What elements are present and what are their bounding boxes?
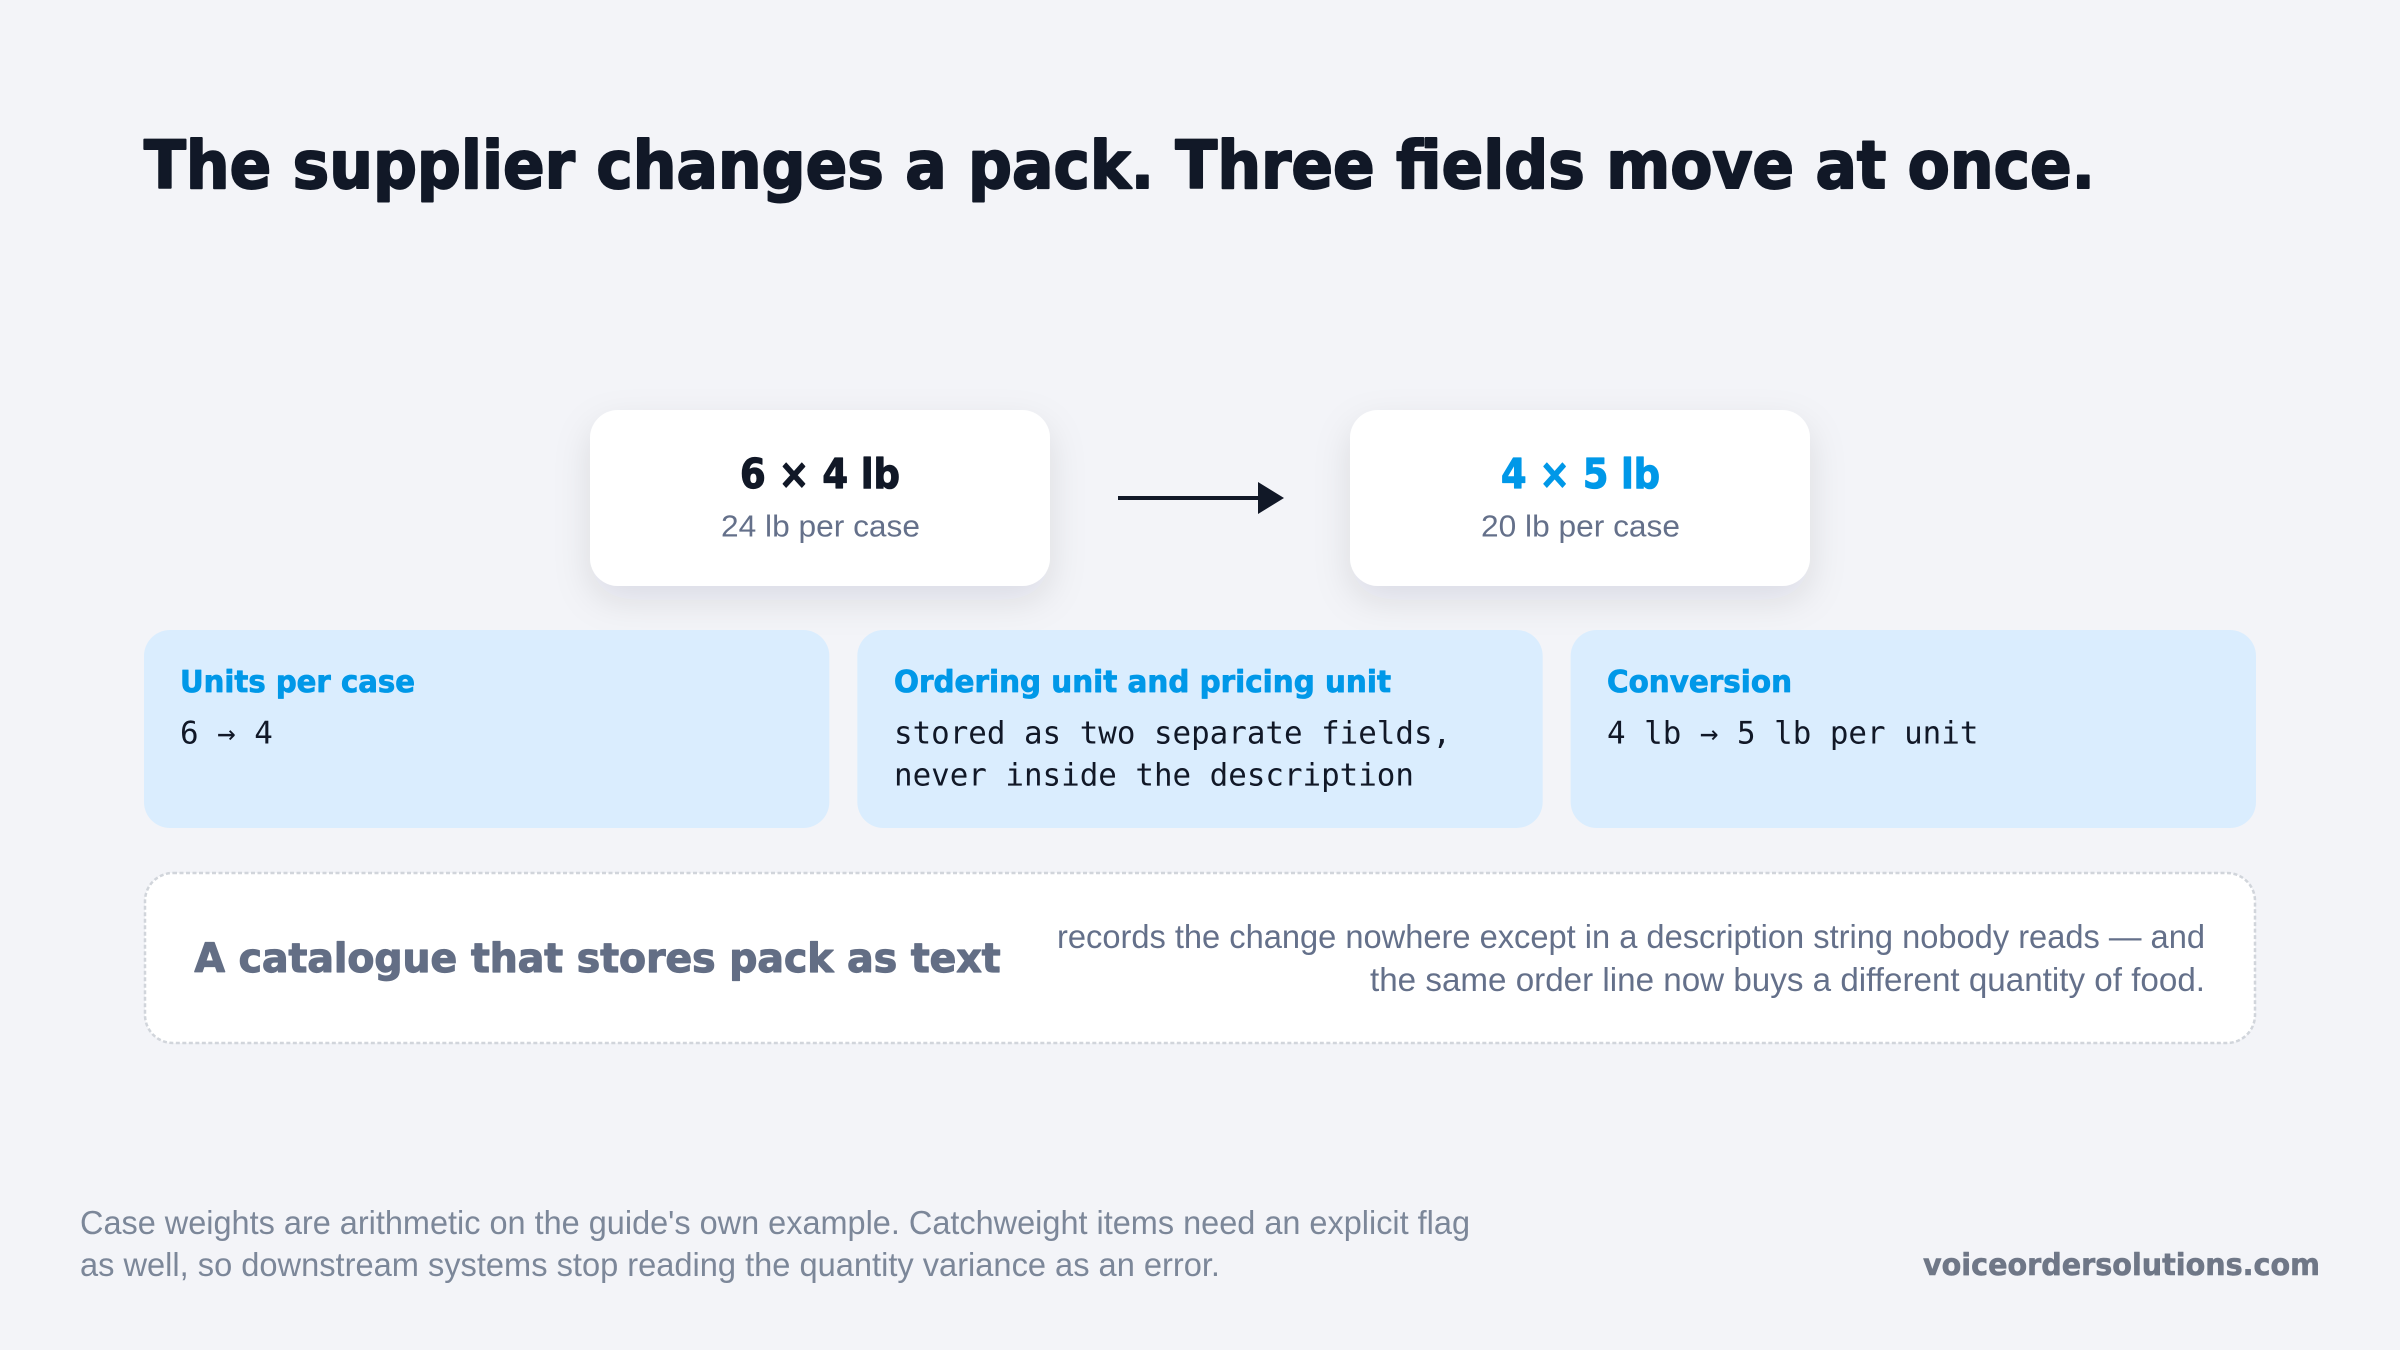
value: conversion change: 4 lb → 5 lb per unit	[1607, 716, 1978, 752]
value: storage rule: never inside the description	[894, 758, 1414, 794]
callout body: records the change nowhere except in a description string nobody reads — and	[1057, 918, 2205, 955]
callout: pack stored as text	[145, 873, 2255, 1043]
panel: before pack card	[590, 410, 1050, 586]
value: storage rule: stored as two separate fields,	[894, 716, 1451, 752]
footnote: as well, so downstream systems stop reading the quantity variance as an error.	[80, 1246, 1220, 1283]
heading: ordering unit and pricing unit: Ordering unit and pricing unit	[894, 665, 1391, 700]
panel: conversion	[1571, 630, 2256, 828]
arrow: before to after	[1118, 482, 1284, 514]
heading: units per case: Units per case	[180, 665, 415, 700]
footnote	[80, 1204, 1470, 1283]
before pack size: 6 × 4 lb	[740, 450, 900, 498]
callout heading: A catalogue that stores pack as text	[194, 936, 1000, 982]
brand url: voiceordersolutions.com	[1923, 1248, 2320, 1283]
callout body: the same order line now buys a different quantity of food.	[1370, 961, 2205, 998]
title: The supplier changes a pack. Three fields move at once.	[144, 127, 2095, 204]
after case weight: 20 lb per case	[1481, 508, 1680, 544]
footnote: Case weights are arithmetic on the guide's own example. Catchweight items need an explicit flag	[80, 1204, 1470, 1241]
callout body	[1057, 918, 2205, 998]
after pack size: 4 × 5 lb	[1501, 450, 1660, 498]
heading: conversion: Conversion	[1607, 665, 1792, 700]
panel: after pack card	[1350, 410, 1810, 586]
value: units change: 6 → 4	[180, 716, 273, 752]
panel: units per case	[144, 630, 829, 828]
before case weight: 24 lb per case	[721, 508, 920, 544]
panel: ordering unit and pricing unit	[857, 630, 1543, 828]
